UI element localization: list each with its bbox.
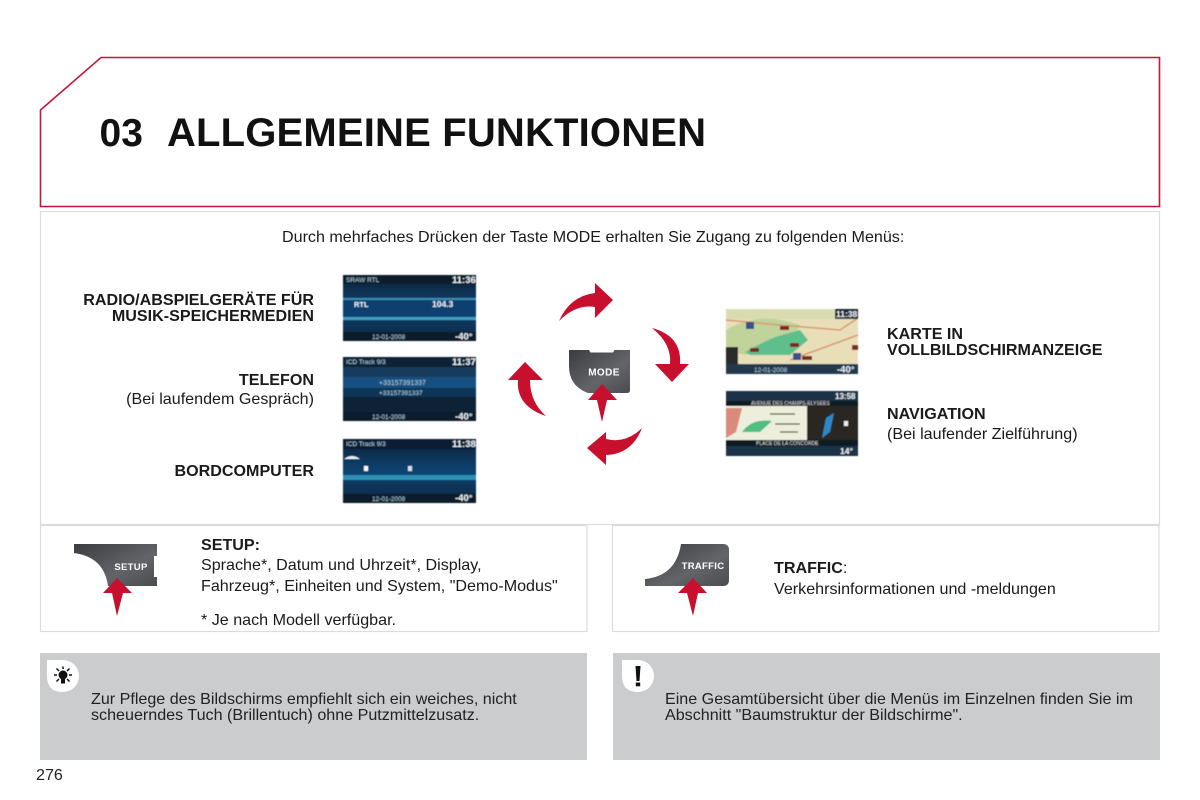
arrow: bottom (587, 428, 642, 465)
screen: radio: SRAW RTL (346, 277, 380, 284)
screen: radio: 11:36 (452, 275, 476, 286)
label: bordcomputer: BORDCOMPUTER (175, 462, 314, 480)
screen: bordcomputer: ICD Track 9/3 (346, 441, 386, 448)
screen: bordcomputer: -40° (455, 493, 473, 504)
traffic text: Verkehrsinformationen und -meldungen (774, 580, 1056, 598)
tip text: Zur Pflege des Bildschirms empfiehlt sich ein weiches, nicht (91, 690, 517, 708)
chapter number: 03 (100, 112, 143, 155)
panel: traffic (612, 526, 1159, 632)
label: karte: VOLLBILDSCHIRMANZEIGE (887, 341, 1103, 359)
arrow: right (652, 328, 689, 382)
label: navigation: (Bei laufender Zielführung) (887, 425, 1078, 443)
icon: TRAFFIC button (645, 544, 729, 586)
label: navigation: NAVIGATION (887, 405, 986, 423)
icon: MODE button: MODE (588, 368, 620, 378)
label: telefon: (Bei laufendem Gespräch) (126, 390, 314, 408)
traffic text: TRAFFIC: (774, 559, 847, 577)
screen: radio: -40° (455, 332, 473, 342)
screen: telefon: ICD Track 9/3 (346, 359, 386, 366)
icon: SETUP button: SETUP (114, 562, 148, 573)
panel: setup (40, 526, 587, 632)
arrow: press TRAFFIC (678, 578, 707, 616)
label: radio (83, 290, 314, 325)
label: radio: MUSIK-SPEICHERMEDIEN (112, 307, 314, 325)
icon: SETUP button (74, 544, 157, 586)
screen: map: 12-01-2008 (754, 367, 788, 374)
tip text: scheuerndes Tuch (Brillentuch) ohne Putzmittelzusatz. (91, 706, 479, 724)
screen: bordcomputer (343, 439, 476, 504)
panel: MODE menus (40, 212, 1160, 524)
setup text: Fahrzeug*, Einheiten und System, "Demo-Modus" (201, 577, 558, 595)
arrow: press SETUP (103, 578, 132, 616)
screen: navigation: AVENUE DES CHAMPS-ELYSEES (751, 401, 830, 407)
icon: exclamation mark (622, 660, 654, 692)
screen: navigation: 14° (840, 446, 853, 456)
page number: 276 (36, 766, 63, 784)
screen: telefon (343, 357, 476, 422)
label: karte: KARTE IN (887, 325, 963, 343)
icon: light bulb (47, 660, 79, 692)
setup text: * Je nach Modell verfügbar. (201, 611, 396, 629)
label: radio: RADIO/ABSPIELGERÄTE FÜR (83, 290, 314, 309)
screen: telefon: +33157391337 (379, 380, 426, 387)
screen: navigation (726, 391, 858, 456)
icon: MODE button (569, 350, 630, 393)
screen: navigation: 13:58 (835, 392, 856, 401)
label: telefon: TELEFON (239, 371, 314, 389)
arrow: left (508, 362, 546, 416)
screen: radio: 104.3 (432, 299, 454, 309)
screen: map (726, 309, 858, 376)
screen: radio: 12-01-2008 (372, 334, 406, 341)
screen: telefon: +33157391337 (379, 390, 423, 397)
screen: telefon: -40° (455, 412, 473, 422)
intro text: Durch mehrfaches Drücken der Taste MODE erhalten Sie Zugang zu folgenden Menüs: (282, 228, 904, 246)
screen: telefon: 11:37 (452, 357, 476, 368)
setup text: Sprache*, Datum und Uhrzeit*, Display, (201, 556, 482, 574)
arrow: press MODE (588, 384, 617, 422)
screen: bordcomputer: 12-01-2008 (372, 496, 406, 503)
screen: radio: RTL (354, 300, 369, 309)
screen: telefon: 12-01-2008 (372, 414, 406, 421)
screen: radio (343, 275, 476, 342)
arrow: top (559, 283, 613, 321)
setup text (201, 536, 558, 629)
MODE button with arrows (508, 283, 689, 465)
label: navigation (887, 405, 1078, 443)
screen: bordcomputer: 11:38 (452, 439, 476, 450)
title: ALLGEMEINE FUNKTIONEN (167, 111, 706, 155)
screen: navigation: PLACE DE LA CONCORDE (756, 441, 819, 447)
panel: note (613, 653, 1160, 760)
note text: Eine Gesamtübersicht über die Menüs im Einzelnen finden Sie im (665, 690, 1133, 708)
traffic text (774, 559, 1056, 598)
label: karte (887, 325, 1103, 359)
setup text: SETUP: (201, 536, 260, 554)
icon: TRAFFIC button: TRAFFIC (682, 561, 724, 572)
screen: map: 11:38 (836, 309, 858, 319)
header panel (40, 58, 1160, 206)
note text: Abschnitt "Baumstruktur der Bildschirme". (665, 706, 963, 724)
tip text (91, 690, 517, 724)
label: telefon (126, 371, 314, 408)
note text (665, 690, 1133, 724)
screen: map: -40° (837, 364, 855, 376)
panel: tip (40, 653, 587, 760)
